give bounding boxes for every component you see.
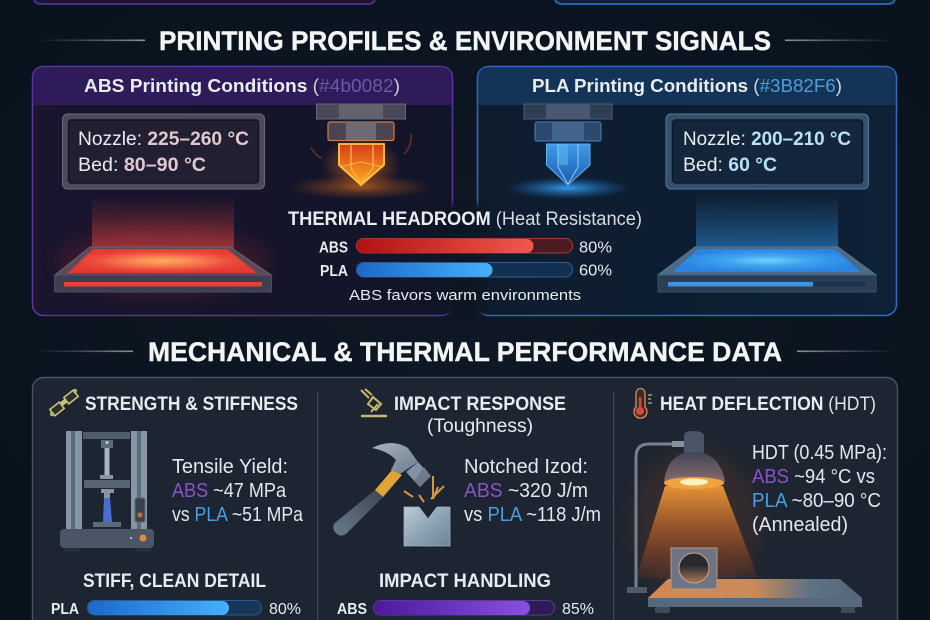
- PLA bar: 60%: [579, 262, 612, 280]
- impact heading: [394, 394, 566, 437]
- tensile yield text: ABS ~47 MPa: [172, 480, 287, 502]
- ABS temperature box: Bed: 80–90 °C: [78, 155, 206, 176]
- heading: printing profiles: PRINTING PROFILES & ENVIRONMENT SIGNALS: [159, 26, 771, 56]
- icon: tensile tester: [60, 431, 154, 552]
- ABS impact bar: [337, 600, 594, 618]
- chart title: THERMAL HEADROOM (Heat Resistance): [288, 209, 642, 230]
- tensile yield text: vs PLA ~51 MPa: [172, 504, 304, 526]
- icon: cool nozzle: [506, 104, 630, 199]
- top panel remnants: [34, 0, 895, 4]
- PLA bar: [320, 262, 612, 280]
- icon: dumbbell: [50, 390, 78, 416]
- HDT text: PLA ~80–90 °C: [752, 490, 881, 512]
- ABS panel title: ABS Printing Conditions (#4b0082): [84, 76, 400, 96]
- HDT text: HDT (0.45 MPa):: [752, 442, 887, 464]
- izod text: ABS ~320 J/m: [464, 480, 588, 502]
- izod text: vs PLA ~118 J/m: [464, 504, 601, 526]
- ABS impact bar: ABS: [337, 601, 367, 618]
- ABS temperature box: [62, 114, 264, 189]
- icon: heat lamp over sample: [627, 431, 862, 613]
- chart note: ABS favors warm environments: [349, 287, 581, 304]
- PLA temperature box: Nozzle: 200–210 °C: [683, 129, 851, 150]
- impact heading: (Toughness): [427, 416, 533, 437]
- heading: mechanical data: MECHANICAL & THERMAL PERFORMANCE DATA: [148, 337, 782, 367]
- icon: hammer and notched sample: [333, 443, 450, 546]
- panel: PLA printing conditions: [478, 66, 896, 316]
- PLA temperature box: [666, 114, 868, 189]
- panel: ABS printing conditions: [32, 66, 452, 316]
- HDT text: [752, 442, 887, 536]
- ABS bar: ABS: [319, 240, 348, 256]
- panel: performance data: [32, 378, 898, 620]
- icon: impact hammer small: [361, 389, 387, 416]
- ABS bar: [319, 238, 612, 256]
- PLA panel title: PLA Printing Conditions (#3B82F6): [532, 76, 842, 96]
- PLA stiffness bar: PLA: [51, 601, 79, 618]
- ABS bar: 80%: [579, 240, 612, 256]
- HDT text: (Annealed): [752, 514, 848, 536]
- izod text: [464, 456, 601, 526]
- heat deflection heading: HEAT DEFLECTION (HDT): [660, 394, 876, 415]
- PLA stiffness bar: [51, 600, 301, 618]
- PLA stiffness bar: 80%: [269, 601, 301, 618]
- HDT text: ABS ~94 °C vs: [752, 466, 875, 488]
- strength heading: STRENGTH & STIFFNESS: [85, 394, 298, 415]
- stiff detail heading: STIFF, CLEAN DETAIL: [83, 571, 266, 592]
- icon: hot nozzle: [289, 104, 433, 199]
- PLA temperature box: Bed: 60 °C: [683, 155, 777, 176]
- PLA bar: PLA: [320, 263, 348, 280]
- ABS temperature box: Nozzle: 225–260 °C: [78, 129, 249, 150]
- icon: heated bed: [54, 195, 272, 294]
- icon: thermometer: [634, 388, 652, 418]
- ABS panel header: [34, 68, 452, 105]
- impact handling heading: IMPACT HANDLING: [379, 571, 551, 592]
- tensile yield text: Tensile Yield:: [172, 456, 288, 478]
- thermal headroom chart: [288, 204, 642, 318]
- izod text: Notched Izod:: [464, 456, 588, 478]
- ABS impact bar: 85%: [562, 601, 594, 618]
- tensile yield text: [172, 456, 304, 526]
- impact heading: IMPACT RESPONSE: [394, 394, 566, 415]
- PLA panel header: [478, 68, 896, 105]
- icon: warm bed: [658, 195, 876, 292]
